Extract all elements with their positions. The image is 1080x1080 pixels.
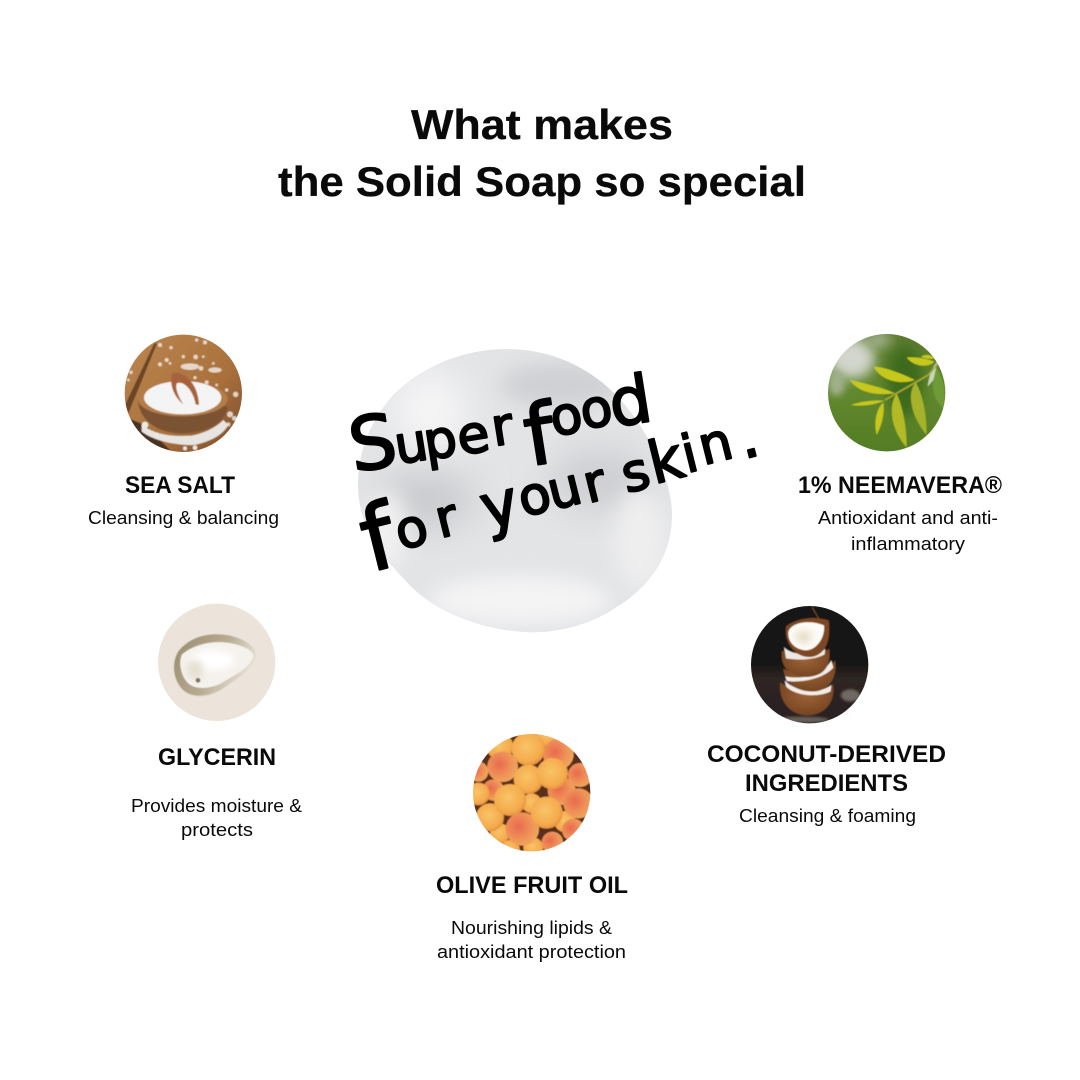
description [131, 796, 302, 840]
image: fruit pile [473, 734, 590, 852]
ingredient: neemavera [798, 332, 1002, 554]
handwritten slogan: f [517, 384, 564, 486]
description [818, 508, 998, 554]
handwritten slogan: . [730, 401, 766, 474]
title: What makes [411, 101, 673, 148]
image: stacked coconut [749, 604, 872, 727]
label: SEA SALT [125, 472, 235, 499]
handwritten slogan: f [350, 483, 408, 593]
label: GLYCERIN [158, 744, 276, 771]
title: the Solid Soap so special [278, 158, 806, 205]
description: Cleansing & balancing [88, 508, 279, 528]
handwritten slogan: uper [390, 396, 518, 477]
label: OLIVE FRUIT OIL [436, 872, 628, 899]
label: INGREDIENTS [745, 770, 908, 797]
handwritten slogan: d [604, 360, 657, 443]
handwritten slogan: or [389, 487, 465, 563]
ingredient: sea salt [88, 332, 279, 528]
description: antioxidant protection [437, 942, 626, 962]
description: Provides moisture & [131, 796, 302, 816]
image: glycerin drop [157, 602, 277, 725]
handwritten slogan: oo [546, 378, 617, 449]
description: Antioxidant and anti- [818, 508, 998, 528]
ingredient: glycerin [131, 602, 302, 840]
label: 1% NEEMAVERA® [798, 472, 1002, 499]
label [707, 741, 946, 797]
description [437, 918, 626, 962]
description: protects [181, 820, 253, 840]
handwritten slogan: S [343, 397, 403, 490]
ingredient: coconut [707, 604, 946, 826]
ingredient: olive fruit oil [436, 723, 628, 962]
label: COCONUT-DERIVED [707, 741, 946, 768]
foam blob [358, 349, 672, 632]
description: Nourishing lipids & [451, 918, 612, 938]
description: Cleansing & foaming [739, 806, 916, 826]
image: neem leaves [825, 332, 948, 455]
handwritten slogan: k [641, 423, 691, 498]
handwritten slogan: in [675, 411, 739, 486]
handwritten slogan: y [473, 465, 526, 545]
title [278, 101, 806, 205]
handwritten slogan: ours [512, 441, 656, 530]
handwritten slogan [343, 360, 766, 593]
description: inflammatory [851, 534, 965, 554]
image: salt bowl [122, 332, 245, 455]
